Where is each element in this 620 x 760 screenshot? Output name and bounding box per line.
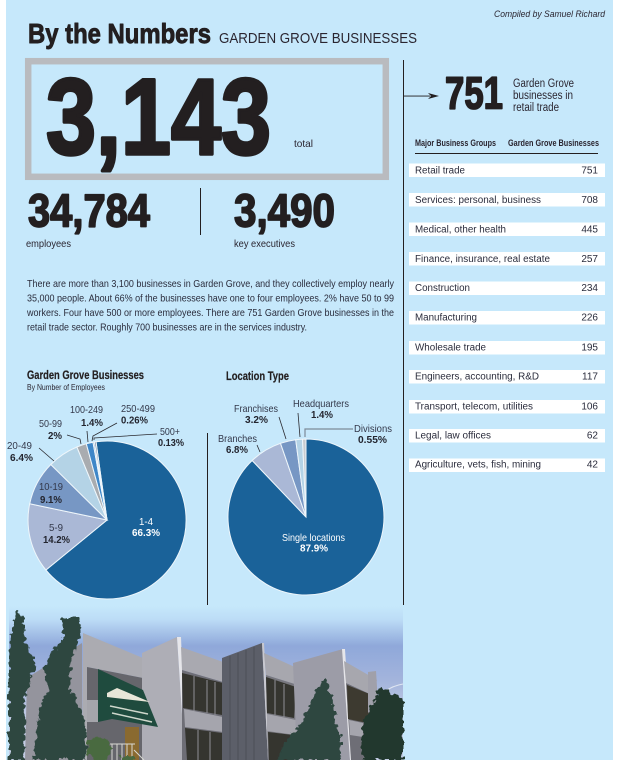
pie labels: employees: 6.4% bbox=[10, 452, 34, 464]
pie chart heading: employees bbox=[27, 370, 144, 392]
stat: employees: 34,784 bbox=[28, 184, 150, 236]
row values: 195 bbox=[581, 342, 598, 354]
trees bbox=[9, 610, 403, 760]
pie labels: employees bbox=[7, 403, 185, 546]
row values: 445 bbox=[581, 224, 598, 236]
title bbox=[28, 18, 417, 49]
pie labels: employees: 50-99 bbox=[39, 418, 62, 430]
pie labels: employees: 1.4% bbox=[81, 417, 104, 429]
compiled by credit: Compiled by Samuel Richard bbox=[494, 9, 606, 19]
panel: total businesses: total bbox=[294, 138, 313, 150]
arrow bbox=[404, 93, 439, 99]
pie labels: location type: Single locations bbox=[282, 532, 345, 544]
row labels: Construction bbox=[415, 283, 470, 294]
row values: 708 bbox=[581, 195, 598, 206]
pie labels: employees: 250-499 bbox=[121, 403, 155, 415]
building walls bbox=[25, 643, 83, 760]
summary paragraph: 35,000 people. About 66% of the businesses have one to four employees. 2% have 50 to 99 bbox=[27, 293, 394, 305]
stat: employees bbox=[26, 184, 150, 250]
row values: 226 bbox=[581, 312, 598, 324]
pie labels: employees: 66.3% bbox=[132, 527, 161, 539]
summary paragraph bbox=[26, 278, 395, 334]
row labels: Legal, law offices bbox=[415, 430, 491, 442]
pie chart heading: employees: Garden Grove Businesses bbox=[27, 370, 144, 382]
table header bbox=[415, 138, 599, 154]
pie labels: location type: Franchises bbox=[234, 403, 278, 415]
row values: 257 bbox=[581, 254, 598, 265]
row backgrounds bbox=[409, 164, 605, 472]
pie labels: location type: Branches bbox=[218, 433, 257, 445]
table: major business groups bbox=[409, 138, 605, 472]
pie labels: location type: Headquarters bbox=[293, 398, 349, 410]
row values: 106 bbox=[581, 402, 598, 412]
pie chart heading: location type: Location Type bbox=[226, 371, 289, 383]
row values: 62 bbox=[587, 430, 598, 442]
pie chart: businesses by number of employees bbox=[28, 441, 186, 599]
callout: 751 retail businesses: Garden Grove bbox=[513, 78, 574, 90]
pie labels: employees: 9.1% bbox=[40, 494, 63, 506]
panel: total businesses: 3,143 bbox=[46, 56, 271, 177]
summary paragraph: workers. Four have 500 or more employees. There are 751 Garden Grove businesses in the bbox=[26, 307, 394, 319]
pie labels: employees: 10-19 bbox=[39, 481, 63, 493]
pie labels: location type: 1.4% bbox=[311, 409, 334, 421]
callout: 751 retail businesses: businesses in bbox=[513, 90, 573, 102]
row values bbox=[581, 166, 598, 470]
summary paragraph: retail trade sector. Roughly 700 businesses are in the services industry. bbox=[27, 322, 307, 334]
pie labels: location type: 3.2% bbox=[245, 414, 269, 426]
pie labels: employees: 100-249 bbox=[70, 404, 103, 416]
row labels: Finance, insurance, real estate bbox=[415, 254, 550, 265]
row labels: Engineers, accounting, R&D bbox=[415, 372, 539, 382]
pie chart: location type bbox=[228, 439, 384, 595]
callout: 751 retail businesses bbox=[445, 68, 574, 118]
row labels: Services: personal, business bbox=[415, 195, 541, 206]
row labels: Agriculture, vets, fish, mining bbox=[415, 460, 541, 470]
callout: 751 retail businesses: 751 bbox=[445, 68, 503, 118]
pie labels: location type: 6.8% bbox=[226, 444, 249, 456]
pie chart heading: employees: By Number of Employees bbox=[27, 383, 105, 392]
pie labels: employees: 5-9 bbox=[49, 522, 63, 534]
photo: office building bbox=[9, 606, 403, 760]
pie labels: employees: 1-4 bbox=[139, 516, 153, 528]
table header: Garden Grove Businesses bbox=[508, 138, 599, 148]
row values: 42 bbox=[587, 460, 598, 470]
summary paragraph: There are more than 3,100 businesses in Garden Grove, and they collectively employ nearly bbox=[27, 278, 395, 290]
row labels bbox=[415, 166, 550, 470]
pie labels: location type: Divisions bbox=[354, 423, 392, 435]
title: GARDEN GROVE BUSINESSES bbox=[219, 31, 417, 47]
pie labels: employees: 20-49 bbox=[7, 440, 32, 452]
row labels: Medical, other health bbox=[415, 224, 506, 236]
row labels: Wholesale trade bbox=[415, 342, 486, 354]
pie labels: employees: 500+ bbox=[160, 426, 180, 438]
pie labels: employees: 0.26% bbox=[121, 414, 149, 426]
door and railing bbox=[125, 727, 139, 760]
stat: key executives: key executives bbox=[234, 238, 295, 250]
pie labels: location type: 0.55% bbox=[358, 434, 388, 446]
row labels: Manufacturing bbox=[415, 312, 477, 324]
stat: employees: employees bbox=[26, 238, 71, 250]
pie labels: employees: 2% bbox=[48, 430, 63, 442]
callout: 751 retail businesses: retail trade bbox=[513, 102, 559, 114]
title: By the Numbers bbox=[28, 18, 211, 49]
window mullions bbox=[194, 676, 284, 760]
pie labels: employees: 14.2% bbox=[43, 534, 71, 546]
pie labels: location type bbox=[218, 398, 392, 554]
pie labels: employees: 0.13% bbox=[158, 437, 185, 449]
row values: 234 bbox=[581, 283, 598, 294]
row labels: Retail trade bbox=[415, 166, 465, 176]
row values: 117 bbox=[582, 372, 598, 382]
row values: 751 bbox=[581, 166, 598, 176]
stat: key executives: 3,490 bbox=[234, 184, 335, 236]
pie labels: location type: 87.9% bbox=[300, 542, 329, 554]
table header: Major Business Groups bbox=[415, 138, 496, 148]
awning bbox=[98, 669, 158, 727]
row labels: Transport, telecom, utilities bbox=[415, 402, 533, 412]
